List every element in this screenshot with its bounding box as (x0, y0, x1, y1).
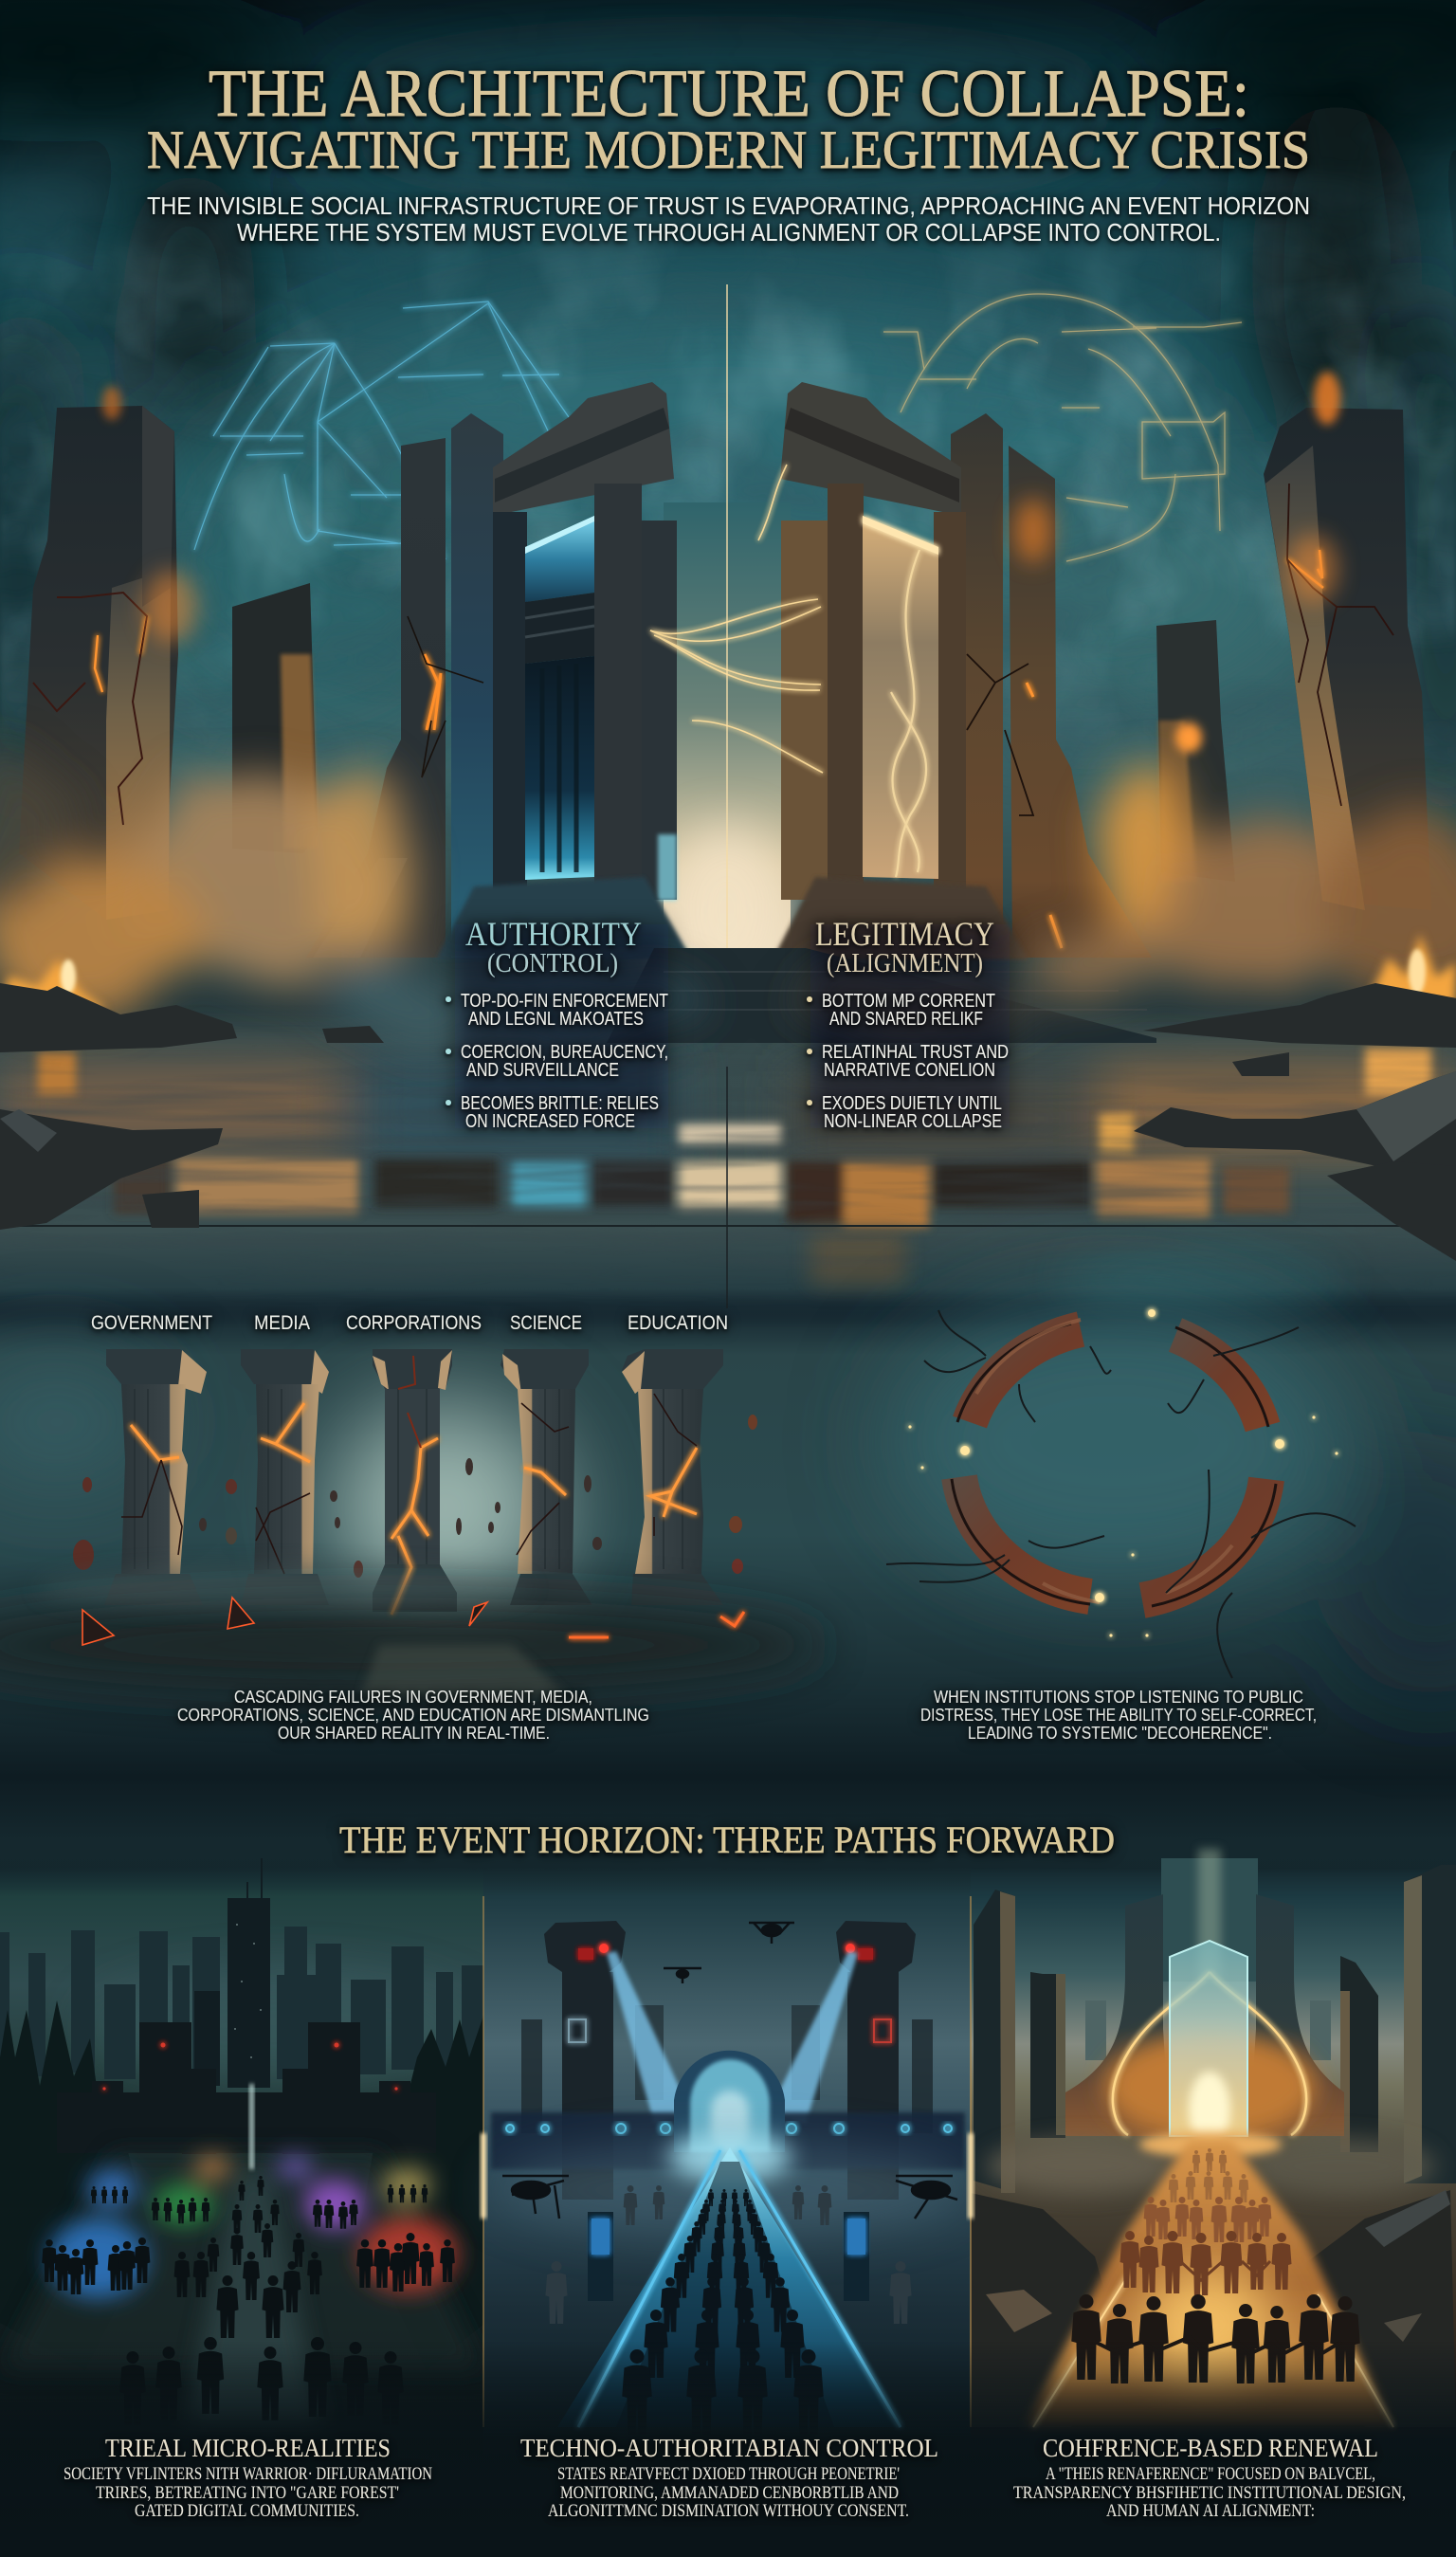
right outer burning column (1156, 372, 1431, 910)
caption: cascading failures: OUR SHARED REALITY IN REAL-TIME. (278, 1724, 550, 1743)
flames at the far edges (0, 934, 1456, 1024)
caption: decoherence: DISTRESS, THEY LOSE THE ABILITY TO SELF-CORRECT, (920, 1706, 1317, 1725)
panel: coherence-based renewal scene (971, 1849, 1456, 2456)
panel: legitimacy column (807, 915, 1009, 1132)
title block (147, 57, 1310, 180)
left outer burning column (19, 386, 318, 920)
pillar: government (104, 1349, 207, 1605)
path text: techno-authoritarian control: ALGONITTMNC DISMINATION WITHOUY CONSENT. (548, 2501, 909, 2521)
caption: decoherence: WHEN INSTITUTIONS STOP LISTENING TO PUBLIC (934, 1688, 1303, 1707)
golden energy wings (1065, 1894, 1344, 2139)
steps (607, 948, 1156, 1043)
panel: authority column: (CONTROL) (487, 949, 618, 978)
subtitle: THE INVISIBLE SOCIAL INFRASTRUCTURE OF TRUST IS EVAPORATING, APPROACHING AN EVENT HORIZON (147, 192, 1310, 220)
sector labels: SCIENCE (510, 1312, 582, 1334)
panel: authority column: BECOMES BRITTLE: RELIES (461, 1093, 659, 1114)
caption: decoherence (920, 1688, 1317, 1743)
united crowd holding hands (1071, 2148, 1360, 2383)
rubble: left and right foreground (0, 983, 1456, 1261)
path text: coherence-based renewal: COHFRENCE-BASED RENEWAL (1043, 2434, 1378, 2462)
path text: techno-authoritarian control: MONITORING, AMMANADED CENBORBTLIB AND (560, 2483, 899, 2503)
panel: authority column (446, 915, 668, 1132)
panel: legitimacy column: NARRATIVE CONELION (824, 1060, 995, 1081)
central gap with light beam (661, 284, 793, 995)
pillars of institutions (104, 1349, 723, 1615)
icon: blue blueprint network (194, 301, 569, 559)
neon processing path (557, 2132, 901, 2427)
bottom fade to text band (0, 2342, 1456, 2557)
golden energy filaments between gates (650, 465, 823, 773)
subtitle (147, 192, 1310, 247)
kiosks and guards (545, 2185, 912, 2324)
forest edges (0, 2000, 485, 2370)
left authority gate (306, 382, 692, 959)
sector labels: GOVERNMENT (91, 1312, 212, 1334)
panel: authority column: AND SURVEILLANCE (466, 1060, 619, 1081)
pillar: media (241, 1349, 329, 1605)
pillar: science (500, 1349, 592, 1605)
ground plane with reflections (0, 1005, 1456, 1327)
golden path (1024, 2141, 1393, 2427)
mist and rubble (971, 2131, 1456, 2427)
fortress wall and keeps (57, 2022, 436, 2154)
pillar: education (622, 1349, 723, 1605)
panel: authority column: ON INCREASED FORCE (465, 1111, 635, 1132)
path text: coherence-based renewal (1013, 2434, 1406, 2521)
glowing panel dividers (481, 1896, 974, 2427)
blue gate wall (491, 2112, 965, 2169)
central arch (674, 2051, 785, 2152)
icon: drones (502, 1923, 957, 2219)
panel: legitimacy column: EXODES DUIETLY UNTIL (822, 1093, 1002, 1114)
path text: techno-authoritarian control: TECHNO-AUTHORITABIAN CONTROL (520, 2434, 938, 2462)
text halo: authority and legitimacy (455, 924, 1010, 1128)
subtitle: WHERE THE SYSTEM MUST EVOLVE THROUGH ALIGNMENT OR COLLAPSE INTO CONTROL. (237, 218, 1221, 247)
path text: techno-authoritarian control (520, 2434, 938, 2521)
path text: tribal micro-realities: TRIRES, BETREATING INTO "GARE FOREST' (96, 2483, 399, 2503)
watchtowers (521, 1921, 933, 2200)
section two atmosphere (0, 1299, 1456, 1697)
caption: cascading failures: CASCADING FAILURES IN GOVERNMENT, MEDIA, (234, 1688, 592, 1707)
coloured tribe glows (48, 2155, 458, 2298)
caption: cascading failures: CORPORATIONS, SCIENCE, AND EDUCATION ARE DISMANTLING (177, 1706, 649, 1725)
path text: techno-authoritarian control: STATES REATVFECT DXIOED THROUGH PEONETRIE' (557, 2464, 900, 2484)
sector labels: CORPORATIONS (346, 1312, 482, 1334)
caption: cascading failures (177, 1688, 649, 1743)
icon: gold blueprint circuit (883, 294, 1242, 561)
sector labels (91, 1312, 728, 1334)
panel: legitimacy column: (ALIGNMENT) (827, 949, 983, 978)
title block: THE ARCHITECTURE OF COLLAPSE: (209, 57, 1249, 131)
pillars floor with shards (0, 1567, 825, 1697)
sector labels: EDUCATION (628, 1312, 728, 1334)
panel: authority column: AUTHORITY (465, 915, 642, 953)
fog at gate base (493, 2143, 967, 2237)
queue of silhouettes (622, 2189, 824, 2435)
panel: authority column: AND LEGNL MAKOATES (468, 1009, 644, 1030)
section heading: three paths: THE EVENT HORIZON: THREE PATHS FORWARD (339, 1818, 1115, 1861)
crystal gateway (1170, 1941, 1247, 2147)
panel: authority column: COERCION, BUREAUCENCY, (461, 1042, 668, 1063)
central wall and light column (1161, 1849, 1258, 1982)
panel: legitimacy column: BOTTOM MP CORRENT (822, 991, 995, 1012)
panel: tribal micro-realities scene (0, 1858, 485, 2456)
panel: legitimacy column: AND SNARED RELIKF (829, 1009, 983, 1030)
path text: tribal micro-realities: TRIEAL MICRO-REALITIES (105, 2434, 391, 2462)
skyline towers (0, 1927, 485, 2079)
path text: tribal micro-realities (64, 2434, 432, 2521)
right legitimacy gate (773, 382, 1152, 959)
pillar: corporations (373, 1349, 457, 1615)
path text: coherence-based renewal: AND HUMAN AI ALIGNMENT: (1106, 2501, 1315, 2521)
fire and smoke in front of the monuments (0, 735, 1456, 1043)
panel: legitimacy column: NON-LINEAR COLLAPSE (824, 1111, 1002, 1132)
broken towers (974, 1865, 1456, 2193)
floating rock debris (73, 1415, 757, 1578)
crowd silhouettes (42, 2176, 455, 2425)
surveillance light beams (607, 1951, 858, 2124)
hero sky and storm clouds (0, 0, 1456, 853)
broken feedback ring (886, 1309, 1356, 1678)
panel: authority column: TOP-DO-FIN ENFORCEMENT (461, 991, 668, 1012)
panel: legitimacy column: RELATINHAL TRUST AND (822, 1042, 1009, 1063)
title block: NAVIGATING THE MODERN LEGITIMACY CRISIS (147, 120, 1310, 180)
sector labels: MEDIA (254, 1312, 310, 1334)
path text: tribal micro-realities: GATED DIGITAL COMMUNITIES. (135, 2501, 359, 2521)
panel: techno-authoritarian scene (483, 1868, 971, 2456)
caption: decoherence: LEADING TO SYSTEMIC "DECOHERENCE". (968, 1724, 1272, 1743)
panel: legitimacy column: LEGITIMACY (815, 915, 994, 953)
path text: tribal micro-realities: SOCIETY VFLINTERS NITH WARRIOR· DIFLURAMATION (64, 2464, 432, 2484)
